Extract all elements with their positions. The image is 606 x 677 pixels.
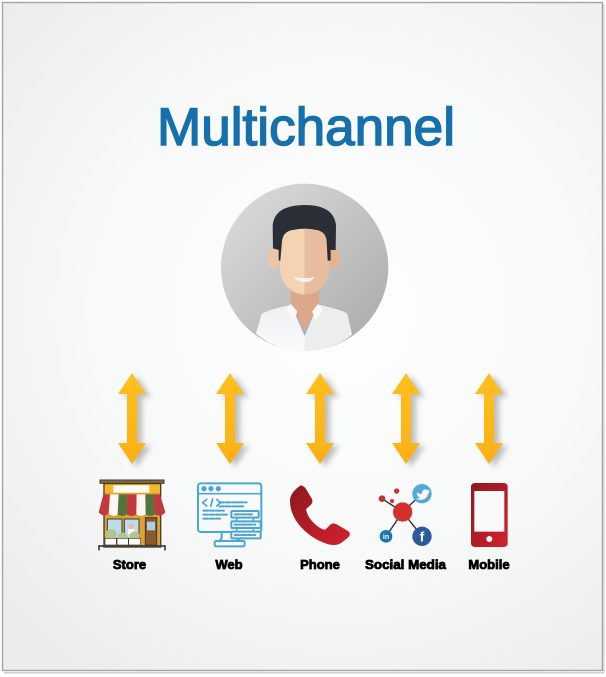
icon: phone [290, 485, 350, 545]
neck [291, 290, 319, 332]
ears [268, 249, 280, 269]
label: mobile: Mobile [468, 557, 510, 572]
icon: social media: f [420, 529, 425, 545]
icon: mobile [471, 483, 508, 547]
label: web: Web [215, 557, 243, 572]
arrow: mobile [475, 373, 508, 467]
shirt [256, 305, 352, 351]
face [280, 227, 305, 295]
icon: store [99, 480, 165, 550]
icon: web [198, 483, 261, 546]
collar [286, 304, 297, 320]
arrow: store [118, 373, 151, 467]
icon: social media [379, 484, 432, 546]
title: Multichannel [157, 98, 455, 157]
arrow: phone [306, 373, 339, 467]
smile [294, 277, 315, 282]
arrow: web [216, 373, 249, 467]
hair [273, 205, 336, 261]
label: phone: Phone [300, 557, 340, 572]
undershirt collar [293, 310, 316, 336]
label: social media: Social Media [365, 557, 447, 572]
icon: social media: in [383, 534, 389, 541]
avatar: person in circle [221, 184, 388, 351]
label: store: Store [113, 557, 146, 572]
arrow: social media [392, 373, 425, 467]
